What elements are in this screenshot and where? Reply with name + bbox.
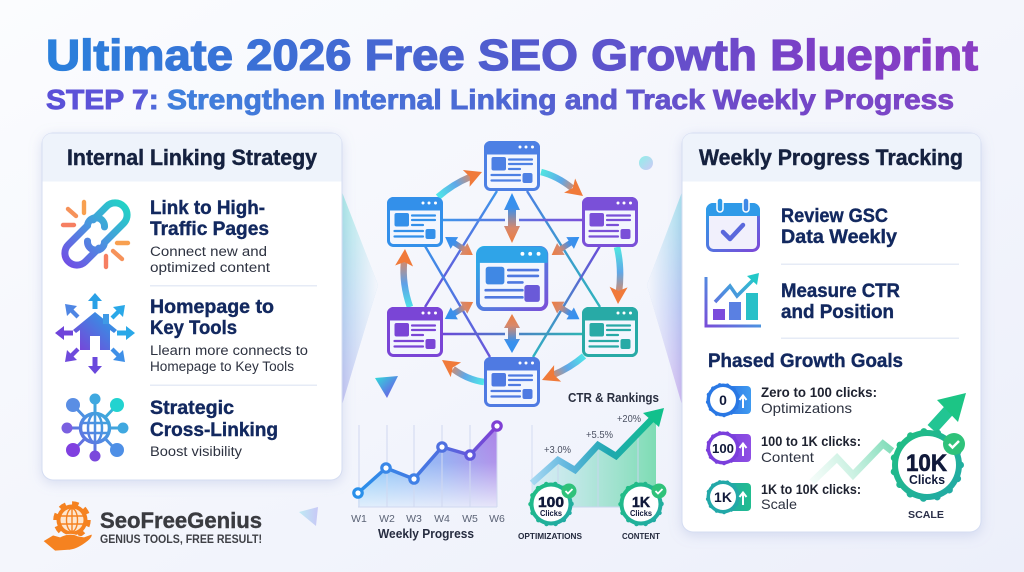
chart: CTR and rankings: CTR & Rankings bbox=[568, 391, 659, 405]
text: link to high-traffic pages: Connect new and bbox=[150, 244, 267, 259]
badge: 1K clicks bbox=[620, 482, 666, 526]
connector lines bbox=[425, 191, 600, 357]
goal: 100 to 1K clicks: Content bbox=[761, 449, 814, 465]
decorative triangle bbox=[375, 376, 398, 398]
badge: 10K clicks bbox=[892, 430, 965, 500]
node: upper left page bbox=[388, 198, 442, 246]
growth arrow bbox=[812, 393, 966, 482]
badge: 10K clicks: 10K bbox=[906, 450, 948, 477]
goal: 100 to 1K clicks: 100 bbox=[712, 441, 734, 456]
node: top page bbox=[486, 142, 538, 190]
text: strategic cross-linking: Cross-Linking bbox=[150, 420, 278, 441]
node: lower left page bbox=[388, 308, 442, 356]
chart: weekly progress: W2 bbox=[379, 513, 395, 525]
panel: internal linking strategy bbox=[42, 133, 342, 480]
logo: SeoFreeGenius bbox=[43, 504, 262, 551]
icon: gear with globe and hand bbox=[43, 504, 92, 551]
chart: weekly progress: W3 bbox=[406, 513, 422, 525]
chart: CTR and rankings: OPTIMIZATIONS bbox=[518, 531, 582, 541]
badge: 10K clicks: Clicks bbox=[909, 473, 945, 487]
chart: CTR and rankings bbox=[518, 391, 666, 541]
icon: house with arrows bbox=[55, 293, 135, 374]
logo: SeoFreeGenius: SeoFreeGenius bbox=[100, 508, 262, 533]
goal: 100 to 1K clicks: 100 to 1K clicks: bbox=[761, 433, 861, 449]
chart: weekly progress: W5 bbox=[462, 513, 478, 525]
node: center page bbox=[478, 248, 546, 309]
node: lower right page bbox=[584, 308, 636, 356]
goal: zero to 100 clicks: Zero to 100 clicks: bbox=[761, 384, 877, 400]
node: bottom page bbox=[486, 358, 538, 406]
goal: zero to 100 clicks bbox=[706, 384, 877, 416]
decorative wedge left bbox=[342, 192, 378, 405]
icon: chain link bbox=[59, 197, 133, 271]
subtitle: STEP 7: Strengthen Internal Linking and Track Weekly Progress bbox=[46, 84, 954, 115]
text: measure CTR and position: and Position bbox=[781, 302, 894, 323]
decorative triangle small bbox=[299, 507, 318, 526]
chart: CTR and rankings: +20% bbox=[617, 413, 641, 425]
chart: CTR and rankings: CONTENT bbox=[622, 531, 661, 541]
goal: 1K to 10K clicks: 1K bbox=[714, 489, 732, 505]
text: homepage to key tools: Llearn more connects to bbox=[150, 343, 308, 358]
goal: zero to 100 clicks: Optimizations bbox=[761, 400, 852, 416]
text: strategic cross-linking: Boost visibility bbox=[150, 444, 242, 459]
decorative dot bbox=[639, 156, 653, 170]
title: Ultimate 2026 Free SEO Growth Blueprint bbox=[46, 31, 978, 80]
chart: CTR and rankings: +3.0% bbox=[544, 444, 571, 456]
chart: weekly progress: W6 bbox=[489, 513, 505, 525]
text: review GSC data weekly: Data Weekly bbox=[781, 227, 897, 248]
panel: weekly progress tracking: SCALE bbox=[908, 509, 944, 521]
badge: 100 clicks: Clicks bbox=[540, 508, 562, 518]
goal: zero to 100 clicks: 0 bbox=[719, 392, 727, 408]
badge: 100 clicks bbox=[530, 482, 576, 526]
logo: SeoFreeGenius: GENIUS TOOLS, FREE RESULT! bbox=[100, 532, 262, 546]
node: upper right page bbox=[584, 198, 636, 246]
text: strategic cross-linking: Strategic bbox=[150, 398, 234, 419]
decorative wedge right bbox=[647, 192, 682, 405]
goal: 100 to 1K clicks bbox=[706, 432, 861, 465]
icon: bar and line chart bbox=[706, 273, 761, 326]
text: homepage to key tools: Homepage to Key Tools bbox=[150, 359, 294, 374]
panel: weekly progress tracking bbox=[682, 133, 981, 532]
badge: 100 clicks: 100 bbox=[538, 495, 564, 511]
chart: weekly progress: Weekly Progress bbox=[378, 526, 474, 541]
panel heading: Weekly Progress Tracking bbox=[699, 145, 963, 170]
double arrows bbox=[441, 193, 583, 353]
panel heading: Internal Linking Strategy bbox=[67, 145, 318, 170]
text: strategic cross-linking bbox=[150, 398, 278, 459]
text: homepage to key tools bbox=[150, 297, 308, 374]
chart: weekly progress: W4 bbox=[434, 513, 450, 525]
chart: CTR and rankings: +5.5% bbox=[586, 429, 613, 441]
badge: 1K clicks: Clicks bbox=[630, 508, 652, 518]
heading: phased growth goals: Phased Growth Goals bbox=[708, 351, 903, 372]
goal: 1K to 10K clicks: Scale bbox=[761, 496, 797, 512]
text: review GSC data weekly bbox=[781, 206, 897, 248]
network diagram bbox=[388, 142, 636, 406]
chart: weekly progress bbox=[351, 422, 505, 541]
text: homepage to key tools: Key Tools bbox=[150, 318, 237, 339]
goal: 1K to 10K clicks bbox=[706, 480, 861, 514]
text: review GSC data weekly: Review GSC bbox=[781, 206, 888, 227]
text: link to high-traffic pages: Traffic Pages bbox=[150, 219, 269, 240]
text: link to high-traffic pages: optimized content bbox=[150, 260, 270, 275]
goal: 1K to 10K clicks: 1K to 10K clicks: bbox=[761, 481, 861, 497]
icon: calendar bbox=[707, 198, 759, 250]
text: link to high-traffic pages bbox=[150, 198, 270, 275]
text: homepage to key tools: Homepage to bbox=[150, 297, 274, 318]
ring arrows bbox=[395, 164, 628, 388]
chart: weekly progress: W1 bbox=[351, 513, 367, 525]
text: link to high-traffic pages: Link to High- bbox=[150, 198, 265, 219]
text: measure CTR and position: Measure CTR bbox=[781, 281, 900, 302]
icon: globe network bbox=[62, 394, 128, 462]
text: measure CTR and position bbox=[781, 281, 900, 323]
badge: 1K clicks: 1K bbox=[632, 495, 651, 511]
